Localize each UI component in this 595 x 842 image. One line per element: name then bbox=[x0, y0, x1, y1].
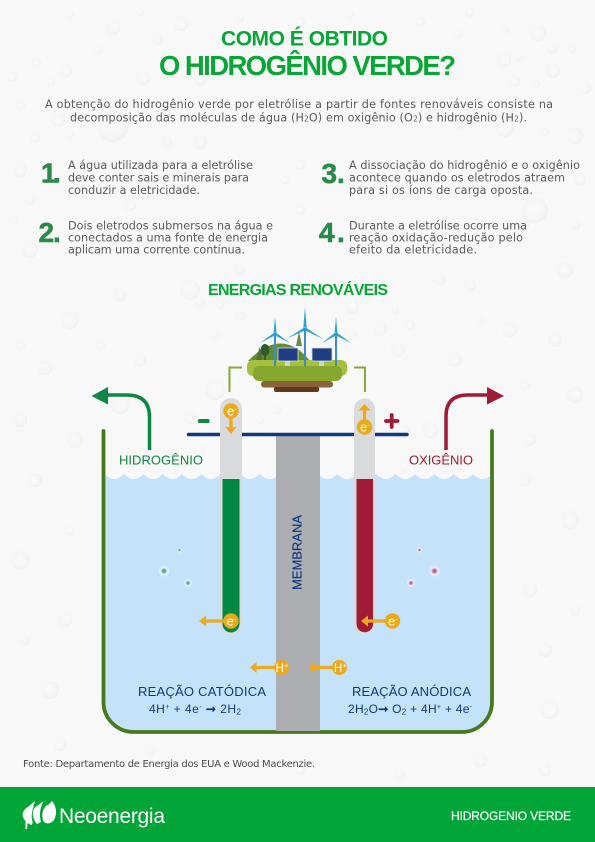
anodic reaction: + 4e bbox=[441, 702, 470, 716]
renewable energy island bbox=[247, 307, 351, 392]
wire bbox=[188, 433, 407, 436]
step 2: 2 bbox=[38, 217, 54, 248]
oxygen arrow bbox=[446, 387, 504, 450]
step 2: aplicam uma corrente contínua. bbox=[68, 244, 245, 256]
hydrogen arrow bbox=[92, 387, 150, 450]
step 1: 1 bbox=[41, 158, 57, 188]
anodic reaction: - bbox=[470, 704, 473, 711]
electron left at anode bbox=[361, 613, 400, 629]
step 1: . bbox=[53, 158, 61, 188]
electron left at anode: e bbox=[388, 614, 395, 628]
cathode bbox=[220, 398, 242, 635]
title: COMO É OBTIDO bbox=[221, 28, 388, 50]
oxygen label: OXIGÊNIO bbox=[409, 452, 473, 468]
electron down bbox=[223, 403, 239, 434]
step 2: . bbox=[53, 217, 61, 248]
plus sign bbox=[386, 415, 398, 427]
electron up: - bbox=[367, 420, 370, 430]
source note: Fonte: Departamento de Energia dos EUA e Wood Mackenzie. bbox=[23, 759, 315, 770]
cathodic reaction: - bbox=[199, 704, 202, 711]
cathodic reaction: REAÇÃO CATÓDICA bbox=[138, 684, 266, 699]
minus sign bbox=[198, 419, 210, 423]
hydrogen label: HIDROGÊNIO bbox=[119, 452, 203, 468]
logo: Neoenergia: Neoenergia bbox=[59, 805, 165, 828]
step 2: Dois eletrodos submersos na água e bbox=[68, 220, 273, 232]
step 2 bbox=[38, 217, 273, 256]
footer label: HIDROGENIO VERDE bbox=[451, 809, 571, 823]
intro text bbox=[45, 98, 553, 124]
cathodic reaction: + bbox=[165, 704, 169, 711]
step 4: efeito da eletricidade. bbox=[349, 244, 477, 256]
step 4: Durante a eletrólise ocorre uma bbox=[349, 220, 527, 232]
cathodic reaction: ➞ bbox=[202, 702, 220, 716]
title: O HIDROGÊNIO VERDE? bbox=[159, 50, 456, 81]
anodic reaction: + 4H bbox=[406, 702, 437, 716]
cathodic reaction: 2H bbox=[220, 702, 236, 716]
cathodic reaction bbox=[138, 684, 266, 716]
anodic reaction: 2 bbox=[402, 708, 407, 716]
proton right: H bbox=[334, 663, 342, 675]
anodic reaction: ➞ O bbox=[378, 702, 402, 716]
anodic reaction bbox=[348, 684, 473, 716]
footer bar bbox=[0, 787, 595, 842]
step 4: . bbox=[337, 217, 345, 248]
step 3: para si os íons de carga oposta. bbox=[349, 184, 533, 197]
step 4: reação oxidação-redução pelo bbox=[349, 232, 523, 244]
step 3: 3 bbox=[322, 158, 337, 189]
proton left: + bbox=[284, 661, 289, 670]
proton left: H bbox=[276, 663, 284, 675]
step 1: deve conter sais e minerais para bbox=[68, 172, 249, 184]
title bbox=[159, 28, 456, 81]
step 2: conectados a uma fonte de energia bbox=[68, 232, 268, 244]
membrane: MEMBRANA bbox=[290, 515, 304, 590]
electron up bbox=[357, 404, 372, 435]
step 1: A água utilizada para a eletrólise bbox=[68, 159, 253, 172]
step 3: acontece quando os eletrodos atraem bbox=[349, 172, 565, 184]
electron left at cathode bbox=[199, 613, 239, 629]
anodic reaction: + bbox=[437, 704, 441, 711]
anodic reaction: 2H bbox=[348, 702, 364, 716]
step 1 bbox=[41, 158, 253, 197]
anodic reaction: O bbox=[369, 702, 378, 716]
step 3: . bbox=[337, 158, 345, 189]
intro text: decomposição das moléculas de água (H2O) em oxigênio (O2) e hidrogênio (H2). bbox=[70, 112, 527, 124]
electron left at cathode: e bbox=[226, 614, 234, 628]
cathodic reaction: + 4e bbox=[170, 702, 199, 716]
cathodic reaction: 2 bbox=[237, 708, 242, 716]
electron left at anode: - bbox=[395, 614, 398, 624]
proton left bbox=[250, 660, 289, 675]
electron left at cathode: - bbox=[234, 614, 237, 624]
heading: energias renováveis: ENERGIAS RENOVÁVEIS bbox=[208, 280, 388, 299]
connectors from island bbox=[230, 368, 365, 392]
logo: Neoenergia bbox=[23, 801, 165, 829]
step 3: A dissociação do hidrogênio e o oxigênio bbox=[349, 159, 580, 172]
water tank bbox=[104, 431, 492, 732]
membrane bbox=[276, 436, 320, 731]
step 4: 4 bbox=[319, 217, 335, 248]
electron up: e bbox=[360, 420, 367, 434]
anode bbox=[354, 398, 375, 634]
anodic reaction: 2 bbox=[364, 708, 369, 716]
electron down: e bbox=[227, 404, 234, 418]
step 4 bbox=[319, 217, 527, 256]
intro text: A obtenção do hidrogênio verde por eletrólise a partir de fontes renováveis consiste na bbox=[45, 98, 553, 111]
step 3 bbox=[322, 158, 580, 197]
particles bbox=[158, 547, 440, 588]
proton right: + bbox=[342, 661, 347, 670]
anodic reaction: REAÇÃO ANÓDICA bbox=[352, 684, 471, 699]
cathodic reaction: 4H bbox=[149, 702, 165, 716]
step 1: conduzir a eletricidade. bbox=[68, 184, 200, 197]
electron down: - bbox=[234, 404, 237, 414]
proton right bbox=[308, 660, 347, 675]
